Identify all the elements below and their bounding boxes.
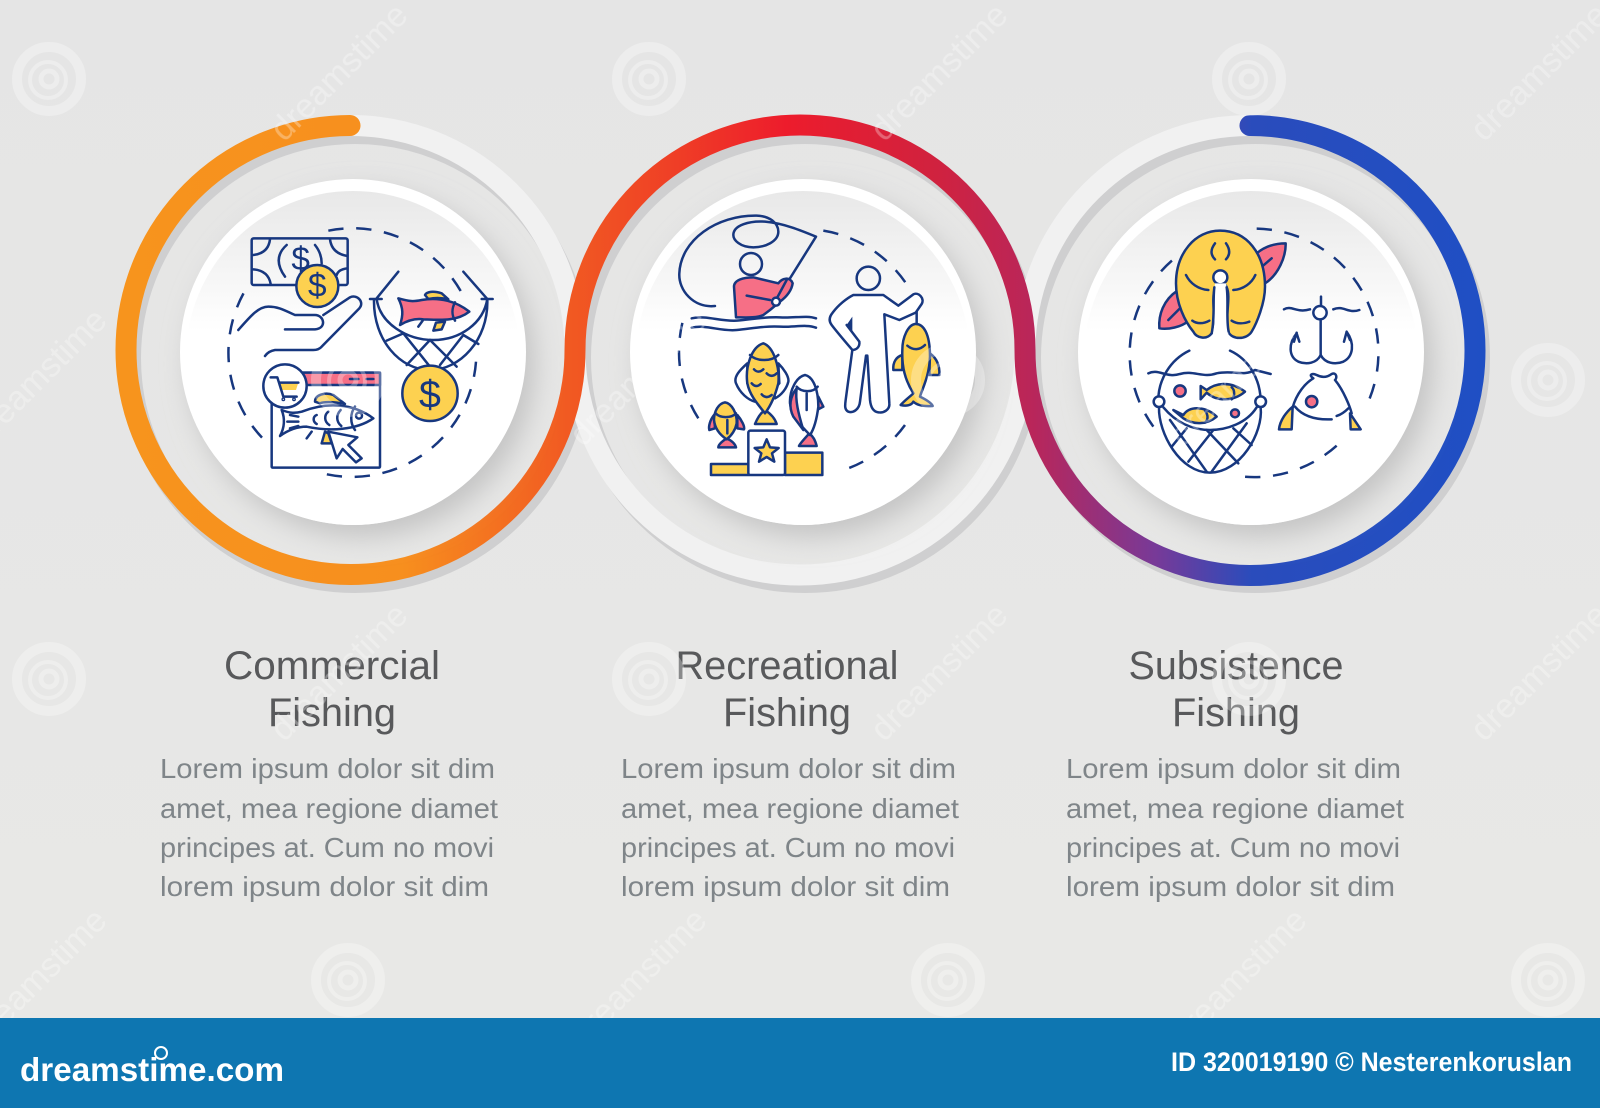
text block: recreational fishing [621, 644, 959, 902]
light ring sections [350, 125, 1250, 575]
icon: commercial fishing [228, 228, 493, 477]
text block: commercial fishing [160, 644, 498, 902]
body: commercial fishing: amet, mea regione diamet [160, 793, 498, 824]
body: commercial fishing: principes at. Cum no movi [160, 832, 494, 863]
watermark wordmarks: dreamstime [1162, 901, 1314, 1053]
panel: subsistence fishing disc [1078, 179, 1433, 537]
body: commercial fishing: Lorem ipsum dolor sit dim [160, 753, 495, 784]
body: commercial fishing [160, 753, 498, 902]
footer credit: ID 320019190 © Nesterenkoruslan [1171, 1047, 1572, 1077]
watermark wordmarks: dreamstime [562, 301, 714, 453]
heading: recreational fishing: Fishing [723, 691, 851, 735]
heading: recreational fishing: Recreational [676, 644, 898, 688]
coloured gradient ribbon [126, 125, 1475, 575]
body: recreational fishing: amet, mea regione diamet [621, 793, 959, 824]
ring shadows [130, 134, 1480, 582]
watermark wordmarks: dreamstime [263, 0, 415, 148]
watermark wordmarks: dreamstime [263, 596, 415, 748]
body: subsistence fishing: Lorem ipsum dolor sit dim [1066, 753, 1401, 784]
body: subsistence fishing: lorem ipsum dolor sit dim [1066, 871, 1395, 902]
body: commercial fishing: lorem ipsum dolor sit dim [160, 871, 489, 902]
watermark wordmarks: dreamstime [863, 0, 1015, 148]
heading: commercial fishing [224, 644, 440, 735]
icon: recreational fishing [679, 216, 939, 475]
heading: commercial fishing: Fishing [268, 691, 396, 735]
heading: subsistence fishing: Fishing [1172, 691, 1300, 735]
footer logo: dreamstime.com [20, 1051, 284, 1088]
icon: commercial fishing: $ [419, 372, 441, 416]
heading: commercial fishing: Commercial [224, 644, 440, 688]
watermark wordmarks: dreamstime [562, 901, 714, 1053]
body: subsistence fishing [1066, 753, 1404, 902]
watermark wordmarks: dreamstime [863, 596, 1015, 748]
body: recreational fishing [621, 753, 959, 902]
body: recreational fishing: principes at. Cum no movi [621, 832, 955, 863]
heading: subsistence fishing: Subsistence [1128, 644, 1344, 688]
heading: subsistence fishing [1128, 644, 1344, 735]
body: subsistence fishing: amet, mea regione diamet [1066, 793, 1404, 824]
body: subsistence fishing: principes at. Cum no movi [1066, 832, 1400, 863]
watermark wordmarks: dreamstime [1162, 301, 1314, 453]
body: recreational fishing: Lorem ipsum dolor sit dim [621, 753, 956, 784]
footer banner [0, 1018, 1600, 1108]
body: recreational fishing: lorem ipsum dolor sit dim [621, 871, 950, 902]
looping ribbon of three rings [126, 125, 1479, 582]
icon: subsistence fishing [1130, 229, 1378, 477]
panel: commercial fishing disc [180, 179, 535, 537]
panel: recreational fishing disc [630, 179, 985, 537]
icon: commercial fishing: $ [308, 268, 327, 305]
icon: commercial fishing: $ [291, 241, 310, 278]
text block: subsistence fishing [1066, 644, 1404, 902]
heading: recreational fishing [676, 644, 898, 735]
